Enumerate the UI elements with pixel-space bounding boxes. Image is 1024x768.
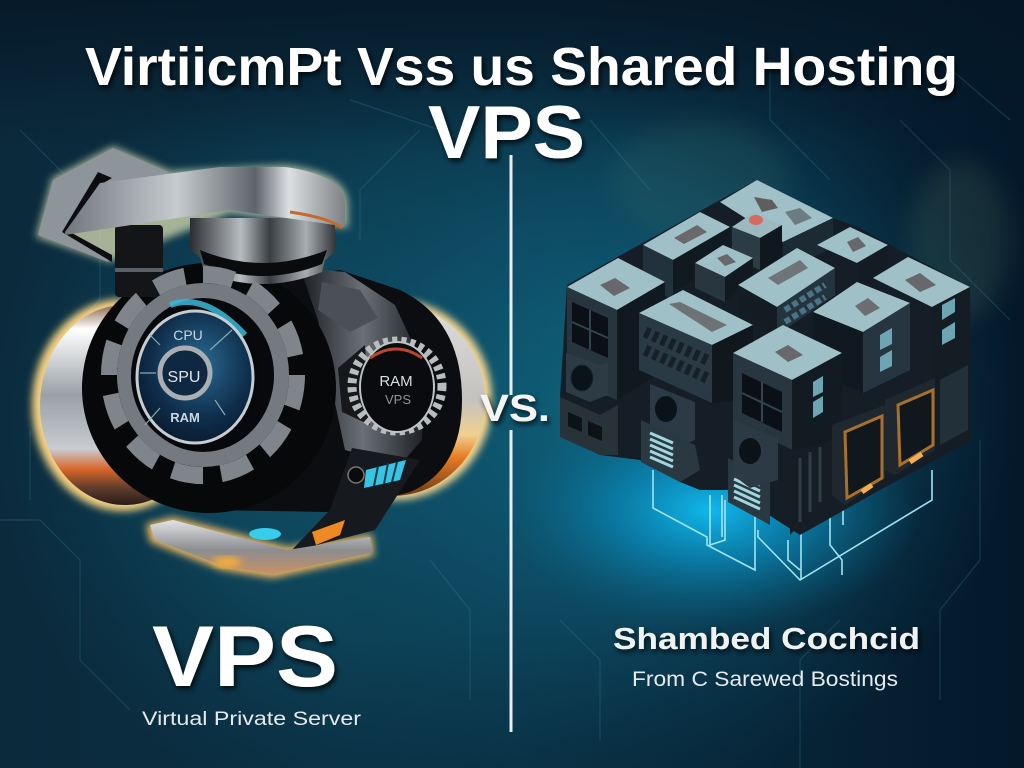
left label: VPS: VPS xyxy=(152,609,338,705)
back block xyxy=(720,180,833,270)
hook xyxy=(38,148,168,262)
top arm xyxy=(65,167,345,235)
orange lamp xyxy=(312,520,345,545)
front speaker module xyxy=(733,420,778,488)
CPU dial xyxy=(131,302,259,448)
lower left box xyxy=(560,397,618,455)
vs label: VS. xyxy=(480,388,550,430)
mid speaker module xyxy=(650,384,695,452)
cyan glow xyxy=(500,390,920,630)
far left block xyxy=(567,258,665,400)
CPU dial: SPU xyxy=(168,369,200,386)
dark housing left xyxy=(82,263,336,513)
post xyxy=(115,225,163,297)
far right block xyxy=(873,257,970,460)
status strap xyxy=(290,448,420,552)
RAM gear xyxy=(338,341,442,432)
CPU dial: RAM xyxy=(170,410,200,425)
left subtitle: Virtual Private Server xyxy=(142,709,362,730)
vent box left xyxy=(641,420,700,482)
left speaker module xyxy=(566,353,608,402)
circuit traces xyxy=(653,470,932,580)
title: VirtiicmPt Vss us Shared Hosting xyxy=(85,37,958,97)
bottom sled xyxy=(150,520,372,574)
post highlight xyxy=(115,268,163,272)
hook inner xyxy=(62,172,112,262)
machine glow halo xyxy=(32,146,492,578)
VPS heading: VPS xyxy=(428,90,585,174)
panel: VPS machine illustration xyxy=(32,146,492,578)
ribbed corner xyxy=(790,440,832,535)
right mid block xyxy=(813,282,910,393)
RAM gear: RAM xyxy=(379,373,413,390)
central small block xyxy=(695,245,753,302)
dial labels: CPU xyxy=(173,327,203,343)
right subtitle: From C Sarewed Bostings xyxy=(632,668,898,691)
orange panel 1 xyxy=(832,405,885,505)
front left block xyxy=(639,290,753,403)
arm orange edge xyxy=(290,212,342,228)
stack shadow ring xyxy=(200,250,327,276)
base stack xyxy=(190,218,335,284)
front block xyxy=(733,325,842,450)
left back block xyxy=(643,212,730,300)
right small block xyxy=(817,227,888,290)
cyan lamp xyxy=(249,528,281,540)
RAM gear: VPS xyxy=(385,392,411,407)
spark xyxy=(213,557,241,567)
chrome shell left xyxy=(40,305,210,505)
center divider xyxy=(510,155,512,732)
hub xyxy=(160,348,210,398)
right label: Shambed Cochcid xyxy=(613,621,920,656)
gear xyxy=(109,274,297,476)
button block xyxy=(732,213,782,270)
chrome shell right xyxy=(299,304,485,496)
orange panel 2 xyxy=(885,378,935,475)
dark housing right xyxy=(210,270,462,512)
cluster silhouette xyxy=(560,180,972,535)
housing band xyxy=(300,268,425,465)
housing sheen xyxy=(318,282,378,332)
center block xyxy=(738,248,835,335)
vent box right xyxy=(728,458,770,525)
panel: shared hosting server cluster xyxy=(500,180,972,630)
